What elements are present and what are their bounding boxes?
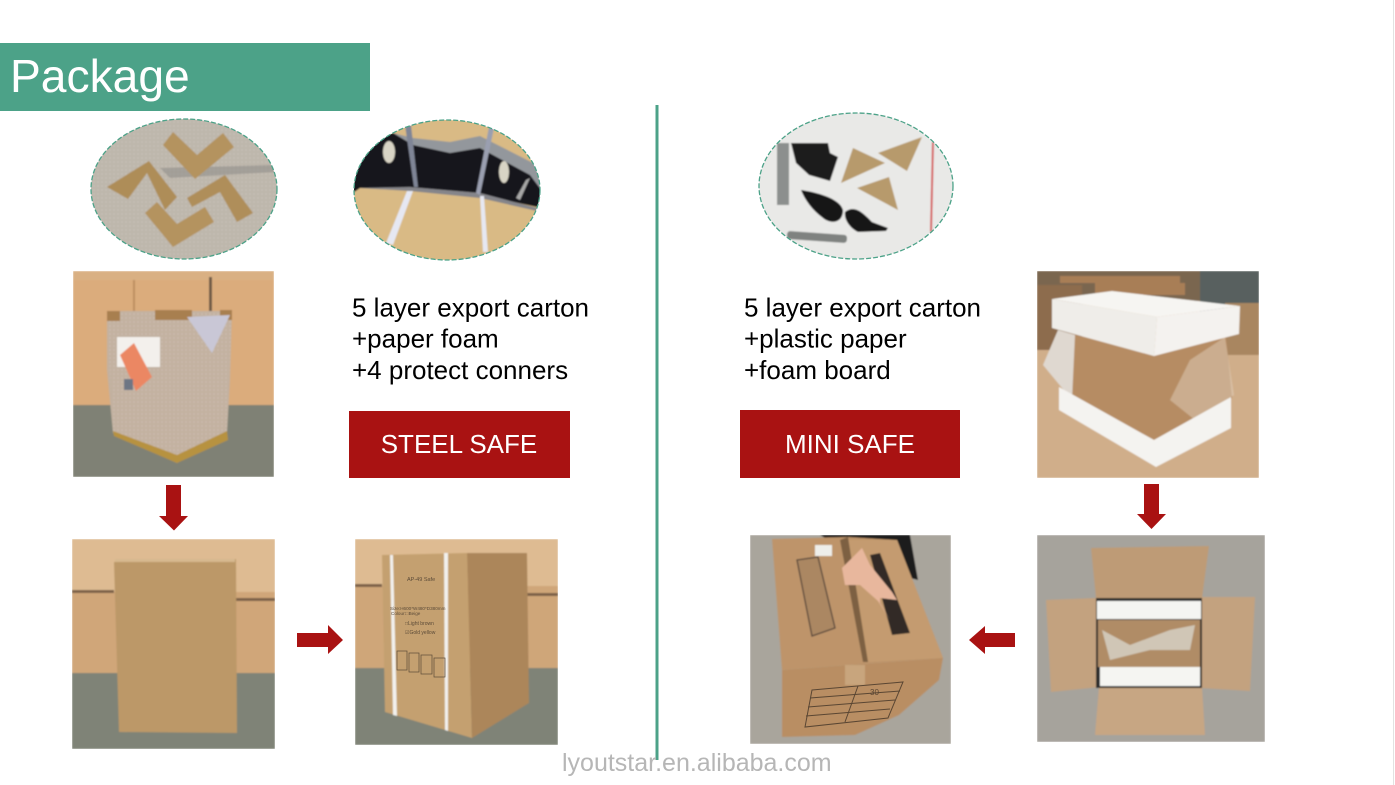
watermark: lyoutstar.en.alibaba.com: [562, 749, 832, 777]
arrow: right, steel safe: [297, 625, 343, 654]
photo: open carton with foam and plastic-wrapped box: [1037, 535, 1265, 742]
photo: mini safe accessories in a plastic bag: [755, 110, 960, 265]
text: steel safe packaging list: +4 protect conners: [352, 355, 568, 385]
photo: taped mini safe carton with hand: [750, 535, 951, 744]
button label: MINI SAFE: MINI SAFE: [785, 429, 915, 459]
button label: STEEL SAFE: [349, 411, 570, 478]
carton printed text: Colour:□Beige: [391, 611, 421, 616]
button label: STEEL SAFE: STEEL SAFE: [381, 429, 537, 459]
arrow: left, mini safe: [969, 626, 1015, 654]
carton handling symbols: [397, 651, 445, 677]
button label: MINI SAFE: [740, 410, 960, 478]
carton printed text: [390, 577, 446, 636]
vertical divider between steel safe and mini safe: [656, 105, 658, 760]
carton table with number: [805, 682, 903, 727]
carton printed text: ☑Gold yellow: [405, 630, 436, 636]
photo: mini safe in plastic between foam boards: [1037, 271, 1259, 478]
photo: strapped carton with safe inside: [350, 115, 545, 265]
arrow: down, steel safe: [159, 485, 188, 530]
title banner: Package: Package: [10, 50, 190, 102]
arrow: down, mini safe: [1137, 484, 1166, 529]
text: steel safe packaging list: +paper foam: [352, 324, 499, 354]
text: steel safe packaging list: 5 layer export carton: [352, 292, 589, 322]
text: mini safe packaging list: +plastic paper: [744, 324, 907, 354]
carton printed text: AP-49 Safe: [407, 577, 435, 583]
photo: bubble-wrapped steel safe with corner protectors: [73, 271, 274, 477]
photo: sealed plain carton: [72, 539, 275, 749]
title banner: Package: [0, 43, 370, 111]
carton printed text: Size:H600*W480*D380mm: [390, 606, 446, 611]
text: mini safe packaging list: 5 layer export carton: [744, 292, 981, 322]
photo: strapped and labelled carton: [355, 539, 558, 745]
photo: taped mini safe carton with hand: 30: [870, 688, 879, 697]
carton printed text: □Light brown: [405, 621, 434, 627]
photo: cardboard corner protectors on bubble wrap: [90, 118, 278, 260]
text: mini safe packaging list: +foam board: [744, 355, 891, 385]
